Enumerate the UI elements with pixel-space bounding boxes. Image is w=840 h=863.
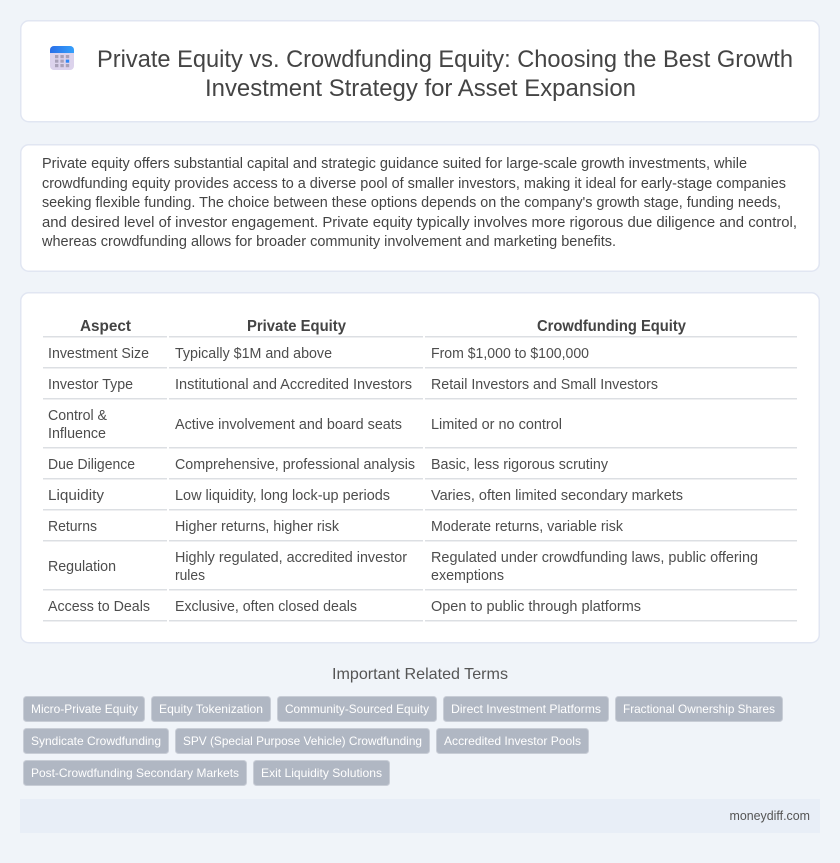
row: returns: Moderate returns, variable risk bbox=[431, 519, 624, 535]
row: regulation: exemptions bbox=[431, 568, 504, 584]
tag bbox=[254, 760, 390, 786]
row: returns: Higher returns, higher risk bbox=[175, 519, 340, 535]
row: investment size: Typically $1M and above bbox=[175, 346, 332, 362]
tag: Accredited Investor Pools bbox=[444, 734, 581, 748]
title bbox=[97, 46, 793, 102]
text block: summary: and desired level of investor engagement. Private equity typically involves more rigorous due diligence and control, bbox=[42, 215, 797, 231]
tag bbox=[152, 696, 270, 722]
tag bbox=[176, 728, 430, 754]
heading: related terms: Important Related Terms bbox=[332, 666, 508, 683]
text block: summary bbox=[41, 156, 797, 250]
table header bbox=[80, 318, 686, 335]
row: due diligence: Comprehensive, professional analysis bbox=[175, 457, 415, 473]
row: investor type bbox=[48, 377, 658, 393]
row: due diligence bbox=[48, 457, 609, 473]
row: access to deals: Exclusive, often closed deals bbox=[175, 599, 357, 615]
row: regulation: Regulated under crowdfunding laws, public offering bbox=[431, 550, 758, 566]
row: control and influence bbox=[48, 408, 562, 442]
row: liquidity: Low liquidity, long lock-up periods bbox=[175, 488, 390, 504]
tag bbox=[436, 728, 588, 754]
row: regulation: rules bbox=[175, 568, 205, 584]
panel: comparison table bbox=[21, 293, 819, 643]
row: control and influence: Influence bbox=[48, 426, 106, 442]
row: due diligence: Due Diligence bbox=[48, 457, 135, 473]
row: access to deals bbox=[48, 599, 641, 615]
row: control and influence: Control & bbox=[48, 408, 107, 424]
row: investment size: From $1,000 to $100,000 bbox=[431, 346, 589, 362]
tag: Community-Sourced Equity bbox=[285, 702, 429, 716]
tag: Direct Investment Platforms bbox=[451, 702, 601, 716]
tag bbox=[278, 696, 436, 722]
row: investor type: Retail Investors and Small Investors bbox=[431, 377, 658, 393]
title: Private Equity vs. Crowdfunding Equity: Choosing the Best Growth bbox=[97, 46, 793, 73]
tag bbox=[444, 696, 608, 722]
row: investment size bbox=[48, 346, 589, 362]
text block: summary: crowdfunding equity provides access to a diverse pool of smaller investors, making it ideal for early-stage companies bbox=[42, 176, 786, 192]
tag: Equity Tokenization bbox=[159, 702, 263, 716]
text block: summary: Private equity offers substantial capital and strategic guidance suited for large-scale growth investments, while bbox=[42, 156, 747, 172]
row: investment size: Investment Size bbox=[48, 346, 149, 362]
row: liquidity: Liquidity bbox=[48, 488, 105, 504]
panel: summary text bbox=[21, 145, 819, 271]
table rules bbox=[43, 336, 797, 622]
tag: Fractional Ownership Shares bbox=[623, 702, 775, 716]
footer bar bbox=[20, 799, 820, 833]
tag: Syndicate Crowdfunding bbox=[31, 734, 161, 748]
row: returns: Returns bbox=[48, 519, 97, 535]
text block: summary: seeking flexible funding. The choice between these options depends on the company's growth stage, funding needs, bbox=[42, 195, 781, 211]
row: due diligence: Basic, less rigorous scrutiny bbox=[431, 457, 609, 473]
row: investor type: Investor Type bbox=[48, 377, 133, 393]
tag bbox=[24, 696, 144, 722]
tag bbox=[24, 760, 246, 786]
tag: SPV (Special Purpose Vehicle) Crowdfunding bbox=[183, 734, 422, 748]
panel: header bbox=[21, 21, 819, 122]
row: control and influence: Active involvement and board seats bbox=[175, 417, 402, 433]
tag bbox=[24, 728, 168, 754]
tag bbox=[616, 696, 782, 722]
icon: calendar bbox=[50, 46, 74, 70]
tag: Micro-Private Equity bbox=[31, 702, 138, 716]
row: liquidity: Varies, often limited secondary markets bbox=[431, 488, 683, 504]
row: regulation: Regulation bbox=[48, 559, 116, 575]
table header: Aspect bbox=[80, 318, 131, 335]
table header: Crowdfunding Equity bbox=[537, 318, 686, 335]
text block: summary: whereas crowdfunding allows for broader community involvement and marketing benefits. bbox=[41, 234, 616, 250]
row: control and influence: Limited or no control bbox=[431, 417, 562, 433]
row: liquidity bbox=[48, 488, 683, 504]
table header: Private Equity bbox=[247, 318, 346, 335]
row: regulation bbox=[48, 550, 758, 584]
row: investor type: Institutional and Accredited Investors bbox=[175, 377, 412, 393]
row: regulation: Highly regulated, accredited investor bbox=[175, 550, 407, 566]
row: returns bbox=[48, 519, 624, 535]
tag: Post-Crowdfunding Secondary Markets bbox=[31, 766, 239, 780]
row: access to deals: Open to public through platforms bbox=[431, 599, 641, 615]
tag: Exit Liquidity Solutions bbox=[261, 766, 382, 780]
row: access to deals: Access to Deals bbox=[48, 599, 150, 615]
footer source: moneydiff.com bbox=[730, 809, 810, 823]
tag list: related terms bbox=[24, 696, 782, 786]
title: Investment Strategy for Asset Expansion bbox=[205, 75, 636, 102]
